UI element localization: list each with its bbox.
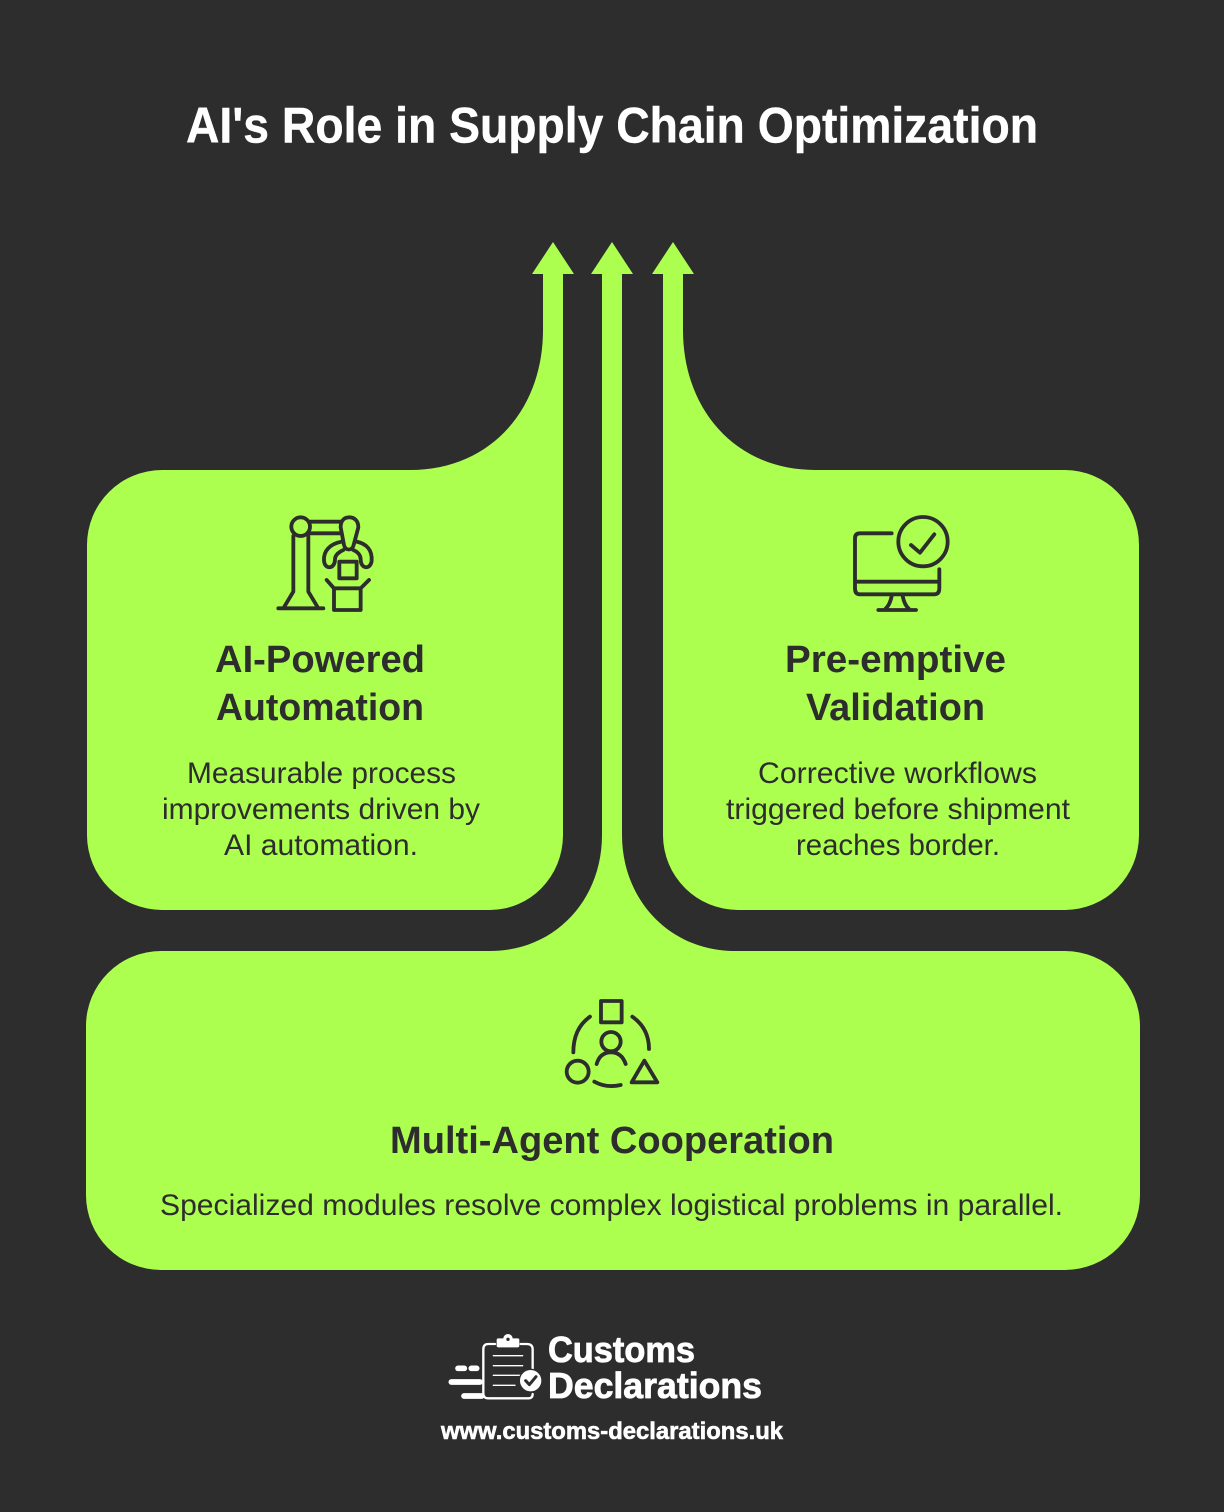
description: AI automation. [224, 829, 418, 862]
description [162, 757, 480, 862]
logo: Customs Declarations [440, 1329, 784, 1445]
description: Measurable process [187, 757, 456, 790]
heading: Multi-Agent Cooperation [390, 1120, 834, 1162]
heading: Automation [216, 687, 424, 729]
panel shape with upward arrow [86, 242, 1140, 1270]
description: reaches border. [796, 829, 1000, 862]
logo wordmark: Customs [548, 1329, 695, 1370]
panel: Multi-Agent Cooperation [86, 242, 1140, 1270]
description [726, 757, 1071, 862]
heading: AI-Powered [215, 639, 425, 681]
heading [785, 639, 1006, 729]
logo wordmark: Declarations [548, 1365, 762, 1406]
icon: clipboard with check [451, 1334, 542, 1398]
heading: Pre-emptive [785, 639, 1006, 681]
logo wordmark [548, 1329, 762, 1406]
panel: Pre-emptive Validation [652, 242, 1139, 910]
panel shape with upward arrow [87, 242, 574, 910]
description: triggered before shipment [726, 793, 1071, 826]
panel: AI-Powered Automation [87, 242, 574, 910]
description: Specialized modules resolve complex logistical problems in parallel. [160, 1189, 1063, 1222]
description: Corrective workflows [758, 757, 1037, 790]
icon: robot arm with box [278, 517, 372, 610]
heading [215, 639, 425, 729]
description: improvements driven by [162, 793, 480, 826]
panel shape with upward arrow [652, 242, 1139, 910]
heading: Validation [806, 687, 985, 729]
icon: monitor with check mark [855, 517, 948, 610]
icon: agents around a person [567, 1001, 657, 1086]
website url: www.customs-declarations.uk [440, 1418, 784, 1445]
title: AI's Role in Supply Chain Optimization [186, 98, 1038, 154]
